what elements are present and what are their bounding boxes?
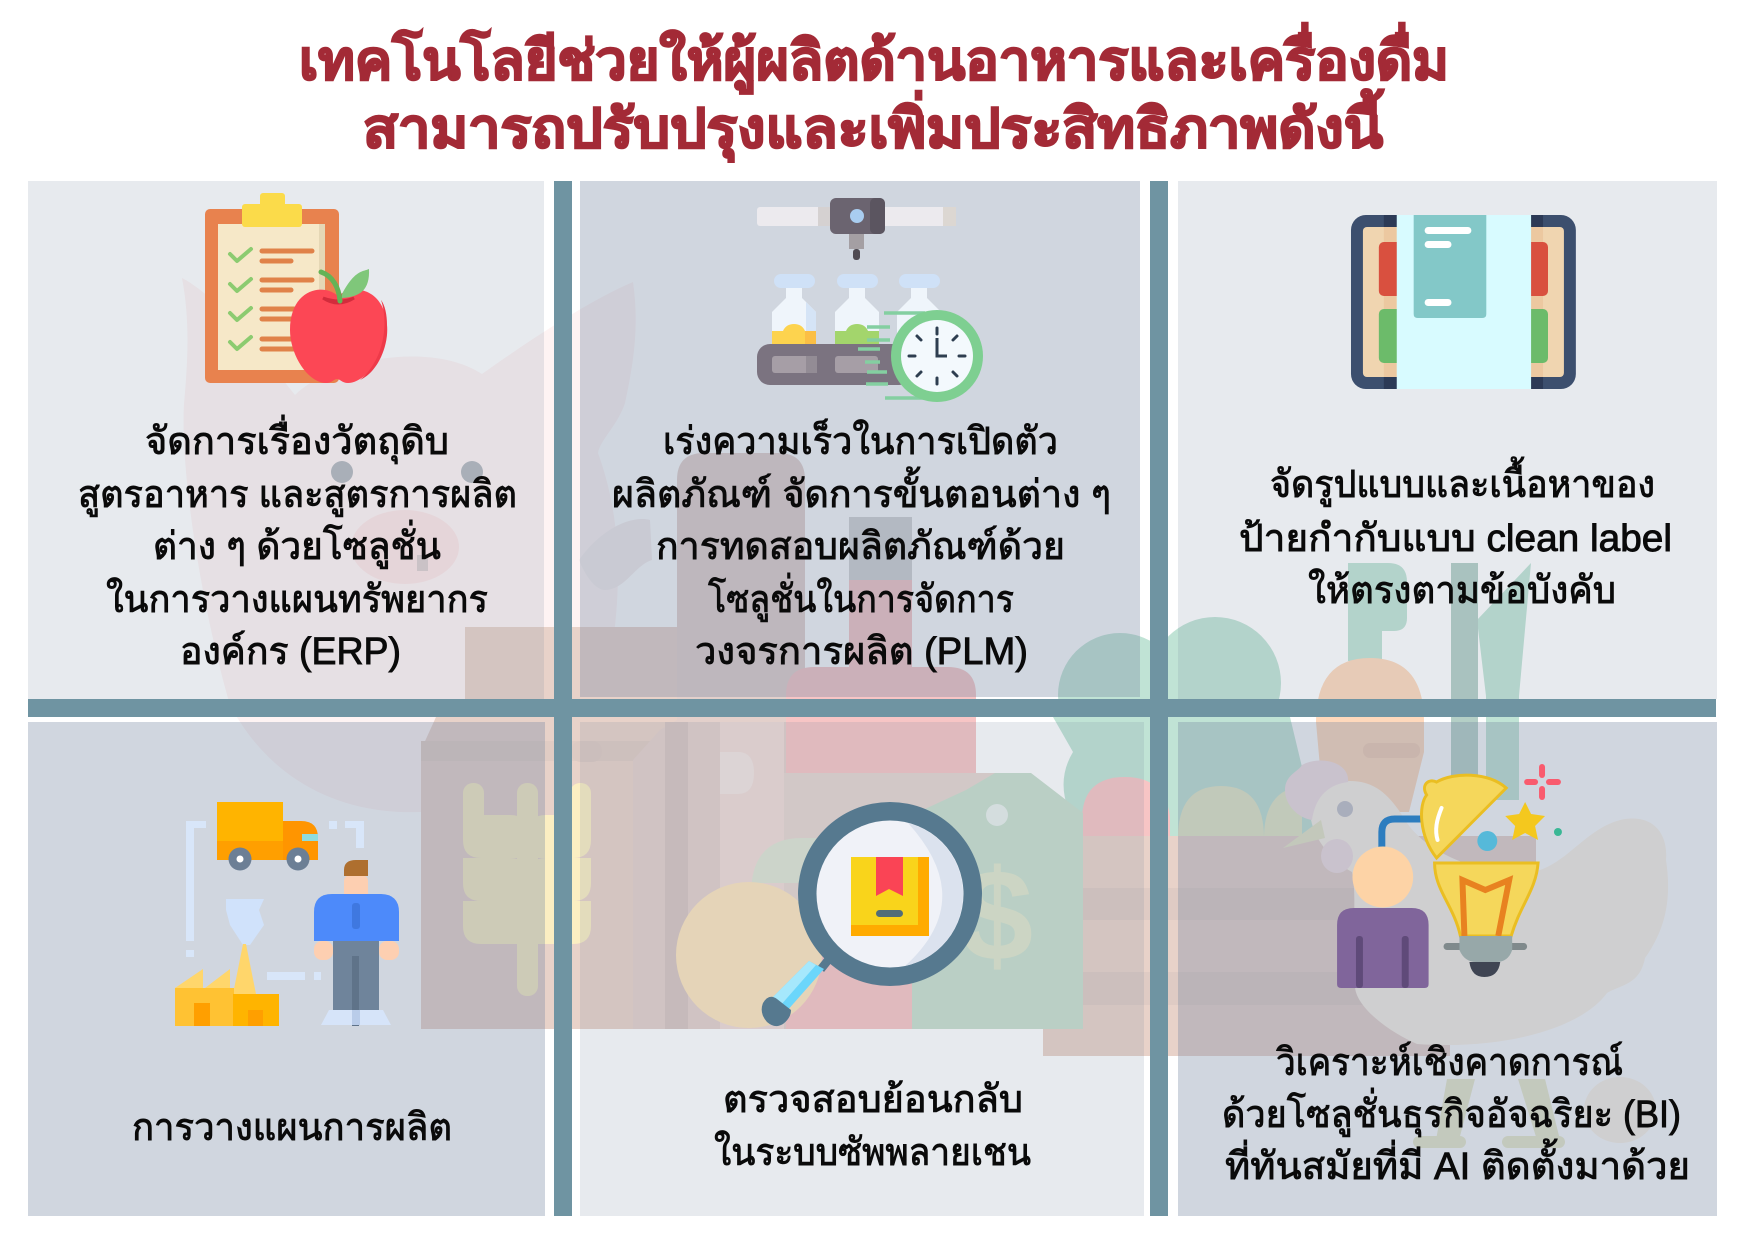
title [299,22,1449,163]
panel: raw materials and recipes [28,181,544,699]
panel: speed up product launch [580,181,1140,697]
text: clean label: ให้ตรงตามข้อบังคับ [1308,569,1616,612]
text: speed up launch [612,418,1111,673]
text: traceability [714,1079,1031,1174]
icon: bottling line with clock [757,198,983,402]
text: speed up launch: ผลิตภัณฑ์ จัดการขั้นตอนต่าง ๆ [612,466,1111,516]
background illustration: faded groceries, pig and chicken: $ [961,842,1033,988]
text: raw materials: จัดการเรื่องวัตถุดิบ [145,415,449,464]
text: raw materials: ในการวางแผนทรัพยากร [106,578,488,621]
text: predictive analytics: ด้วยโซลูชั่นธุรกิจอัจฉริยะ (BI) [1222,1088,1681,1137]
text: raw materials: สูตรอาหาร และสูตรการผลิต [78,474,517,517]
icon: clipboard with apple [205,193,387,383]
panel: production planning [28,722,545,1216]
text: traceability: ตรวจสอบย้อนกลับ [723,1079,1023,1121]
text: speed up launch: โซลูชั่นในการจัดการ [708,573,1014,622]
panel: traceability [580,722,1144,1216]
title: สามารถปรับปรุงและเพิ่มประสิทธิภาพดังนี้ [363,89,1384,163]
panel: clean label [1178,181,1717,699]
text: predictive analytics [1222,1041,1690,1188]
icon: truck, factory and worker [175,802,399,1026]
text: speed up launch: เร่งความเร็วในการเปิดตัว [663,418,1058,463]
title: เทคโนโลยีช่วยให้ผู้ผลิตด้านอาหารและเครื่องดื่ม [299,22,1449,94]
icon: person with open light bulb [1337,767,1562,988]
panel: predictive analytics [1178,722,1717,1216]
text: raw materials: ต่าง ๆ ด้วยโซลูชั่น [153,520,441,569]
text: speed up launch: วงจรการผลิต (PLM) [695,631,1028,673]
text: clean label: ป้ายกำกับแบบ clean label [1239,518,1672,560]
text: traceability: ในระบบซัพพลายเชน [714,1131,1031,1174]
text: speed up launch: การทดสอบผลิตภัณฑ์ด้วย [656,525,1065,568]
text: production planning: การวางแผนการผลิต [132,1107,452,1149]
text: clean label [1239,456,1672,612]
text: raw materials [78,415,517,673]
text: clean label: จัดรูปแบบและเนื้อหาของ [1270,456,1655,507]
icon: magnifier with package [762,802,982,1026]
text: raw materials: องค์กร (ERP) [180,630,401,673]
icon: wrapped tablet label [1351,215,1576,389]
text: predictive analytics: วิเคราะห์เชิงคาดการณ์ [1276,1041,1623,1084]
text: predictive analytics: ที่ทันสมัยที่มี AI ติดตั้งมาด้วย [1225,1138,1690,1188]
background illustration: faded groceries, pig and chicken [182,278,1668,1148]
